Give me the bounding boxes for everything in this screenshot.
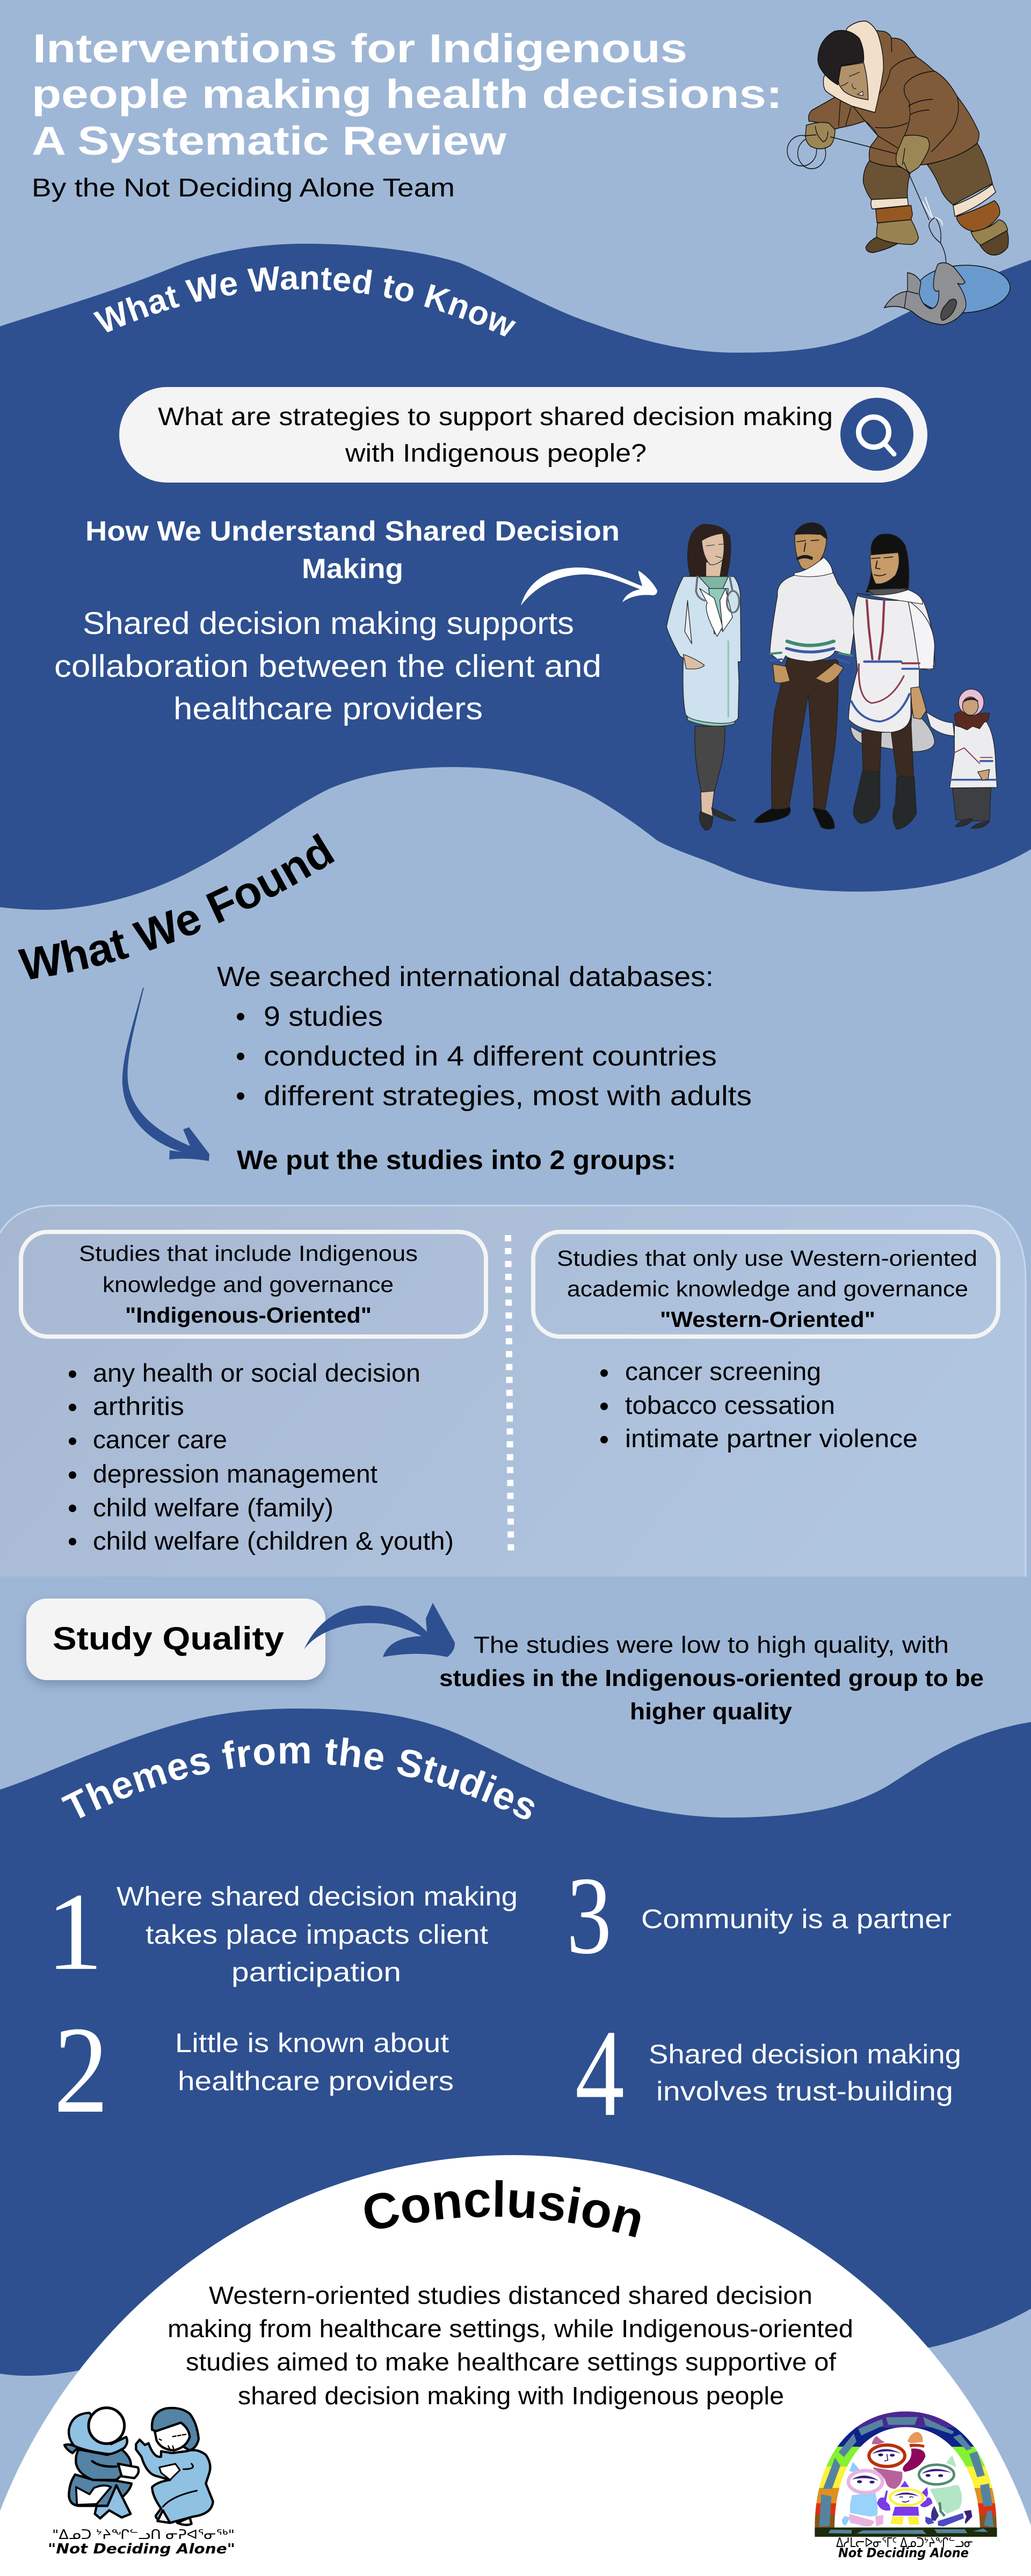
heading: conclusion: Conclusion [364,2180,640,2237]
definition text: healthcare providers [173,691,483,726]
logo artwork [812,2410,999,2537]
arrow: study quality to description [304,1603,455,1657]
theme 3: Community is a partner [641,1904,952,1934]
search results text [217,961,752,1112]
list: Indigenous-oriented topics: cancer care [93,1425,227,1454]
list: Western-oriented topics [600,1357,918,1453]
list: Western-oriented topics: intimate partner violence [625,1424,918,1453]
badge: study quality [26,1599,325,1680]
conclusion text [168,2281,853,2410]
pants [863,143,992,205]
parka seams [839,38,959,152]
box: Indigenous-oriented: "Indigenous-Oriented" [125,1303,372,1327]
question text: What are strategies to support shared decision making [158,402,833,430]
theme 1: takes place impacts client [146,1920,488,1950]
theme 1 [46,1870,518,1993]
figure: top center [869,2432,925,2489]
theme 3: 3 [567,1854,612,1977]
subheading: how we understand shared decision making: How We Understand Shared Decision [85,516,620,547]
bullet list: search findings: different strategies, most with adults [264,1081,752,1112]
logo text: syllabics: "ᐃᓄᑐ ᔾᔨᖏᓪᓗᑎ ᓂᕈᐊᕐᓂᖅ" [52,2527,235,2542]
figure: right [919,2455,972,2527]
subheading: how we understand shared decision making: Making [302,553,403,585]
conclusion text: making from healthcare settings, while Indigenous-oriented [168,2315,853,2343]
bullet list: search findings [237,1001,752,1112]
box: Western-oriented: Studies that only use Western-oriented [557,1246,977,1271]
theme 1: 1 [46,1870,103,1993]
box: Western-oriented: academic knowledge and governance [567,1276,968,1301]
panel: study groups [0,1206,1026,1577]
list: Western-oriented topics: cancer screening [625,1357,821,1385]
theme 2: 2 [54,2001,108,2139]
child [926,689,997,828]
theme 4: 4 [575,2004,625,2142]
title: Interventions for Indigenous [33,26,687,71]
arrow: blue curved down to groups [122,988,209,1161]
logo: igloo family, Not Deciding Alone [812,2410,999,2560]
fish [884,262,966,325]
theme 4 [575,2004,961,2142]
box: Western-oriented [533,1232,998,1337]
title: A Systematic Review [32,118,507,163]
igloo base [815,2528,997,2537]
heading: themes from the studies: Themes from the Studies [61,1737,534,1820]
list: Indigenous-oriented topics: child welfare (children & youth) [93,1527,454,1555]
arrow: white curved to people [521,567,657,605]
section background: themes wave [0,1709,1031,2376]
icon: magnifying glass [840,398,913,471]
fish eye and fin lines [941,299,957,320]
list: Indigenous-oriented topics: depression management [93,1460,377,1488]
hood ruff [823,21,883,113]
bullet list: search findings: 9 studies [264,1001,383,1032]
list: Indigenous-oriented topics: any health or social decision [93,1359,420,1387]
study quality description: higher quality [630,1698,793,1725]
heading: what we found: What We Found [18,833,335,979]
question text [158,402,833,467]
boots [876,220,1008,245]
list: Indigenous-oriented topics: arthritis [93,1392,184,1420]
figure: left [842,2462,883,2527]
box: Indigenous-oriented [21,1232,486,1337]
conclusion text: studies aimed to make healthcare settings supportive of [186,2348,836,2376]
man in white parka [754,523,855,829]
definition text: Shared decision making supports [83,606,574,641]
illustration: ice fisher with fish [787,21,1011,325]
question text: with Indigenous people? [345,439,647,467]
study quality description: studies in the Indigenous-oriented group to be [439,1665,984,1691]
rainbow arch [812,2410,999,2528]
subheading: two groups: We put the studies into 2 groups: [237,1145,676,1175]
parka [809,27,979,166]
study quality description [439,1632,984,1725]
logo text: english: "Not Deciding Alone" [48,2541,235,2557]
mitts [805,122,930,173]
search results text: We searched international databases: [217,961,714,993]
face [838,63,868,100]
logo: two seated people, Not Deciding Alone [48,2408,235,2557]
definition text: collaboration between the client and [54,649,601,684]
box: Indigenous-oriented: Studies that include Indigenous [79,1241,418,1266]
theme 4: Shared decision making [649,2039,961,2069]
logo text: english: Not Deciding Alone [838,2545,969,2560]
conclusion text: shared decision making with Indigenous people [238,2382,784,2410]
study quality description: The studies were low to high quality, with [474,1632,949,1658]
figure: center child [877,2481,933,2524]
illustration: doctor and Indigenous family [666,523,997,830]
woman in amauti [848,534,935,829]
mitt lines and rope [804,126,946,262]
hair [818,31,864,85]
facial features [841,72,863,96]
bullet list: search findings: conducted in 4 different countries [264,1041,717,1072]
theme 2 [54,2001,454,2139]
title [32,26,782,163]
theme 4: involves trust-building [656,2076,953,2106]
igloo stones [819,2417,994,2534]
line highlight [923,198,942,225]
theme 1: participation [231,1957,401,1987]
definition text [54,606,601,726]
theme 3 [567,1854,952,1977]
byline: By the Not Deciding Alone Team [32,174,455,202]
title: people making health decisions: [32,71,782,116]
logo figures [64,2408,213,2525]
orange bands [876,201,1000,231]
boot soles [866,230,1008,255]
heading: what we wanted to know: What We Wanted to Know [93,266,517,337]
subheading: how we understand shared decision making [85,516,620,585]
doctor [666,524,741,830]
search bar [119,387,927,483]
box: Western-oriented: "Western-Oriented" [660,1307,875,1332]
ice hole [915,264,1011,315]
section background: what we wanted to know wave [0,244,1031,910]
theme 2: healthcare providers [178,2066,454,2096]
conclusion white arch [0,2155,1031,2576]
fishing line coils [787,135,826,169]
conclusion text: Western-oriented studies distanced shared decision [209,2281,812,2309]
list: Western-oriented topics: tobacco cessation [625,1391,835,1419]
theme 2: Little is known about [175,2028,449,2058]
logo text: syllabics: ᐃᓱᒪᓕᐅᓂᕐᒥᑦ ᐃᓄᑑᔾᔨᖏᓪᓗᓂ [836,2535,973,2550]
box: Indigenous-oriented: knowledge and governance [103,1272,394,1297]
badge: study quality: Study Quality [53,1621,285,1656]
list: Indigenous-oriented topics [69,1359,454,1555]
list: Indigenous-oriented topics: child welfare (family) [93,1493,333,1522]
cuffs [871,184,996,216]
theme 1: Where shared decision making [117,1881,518,1911]
